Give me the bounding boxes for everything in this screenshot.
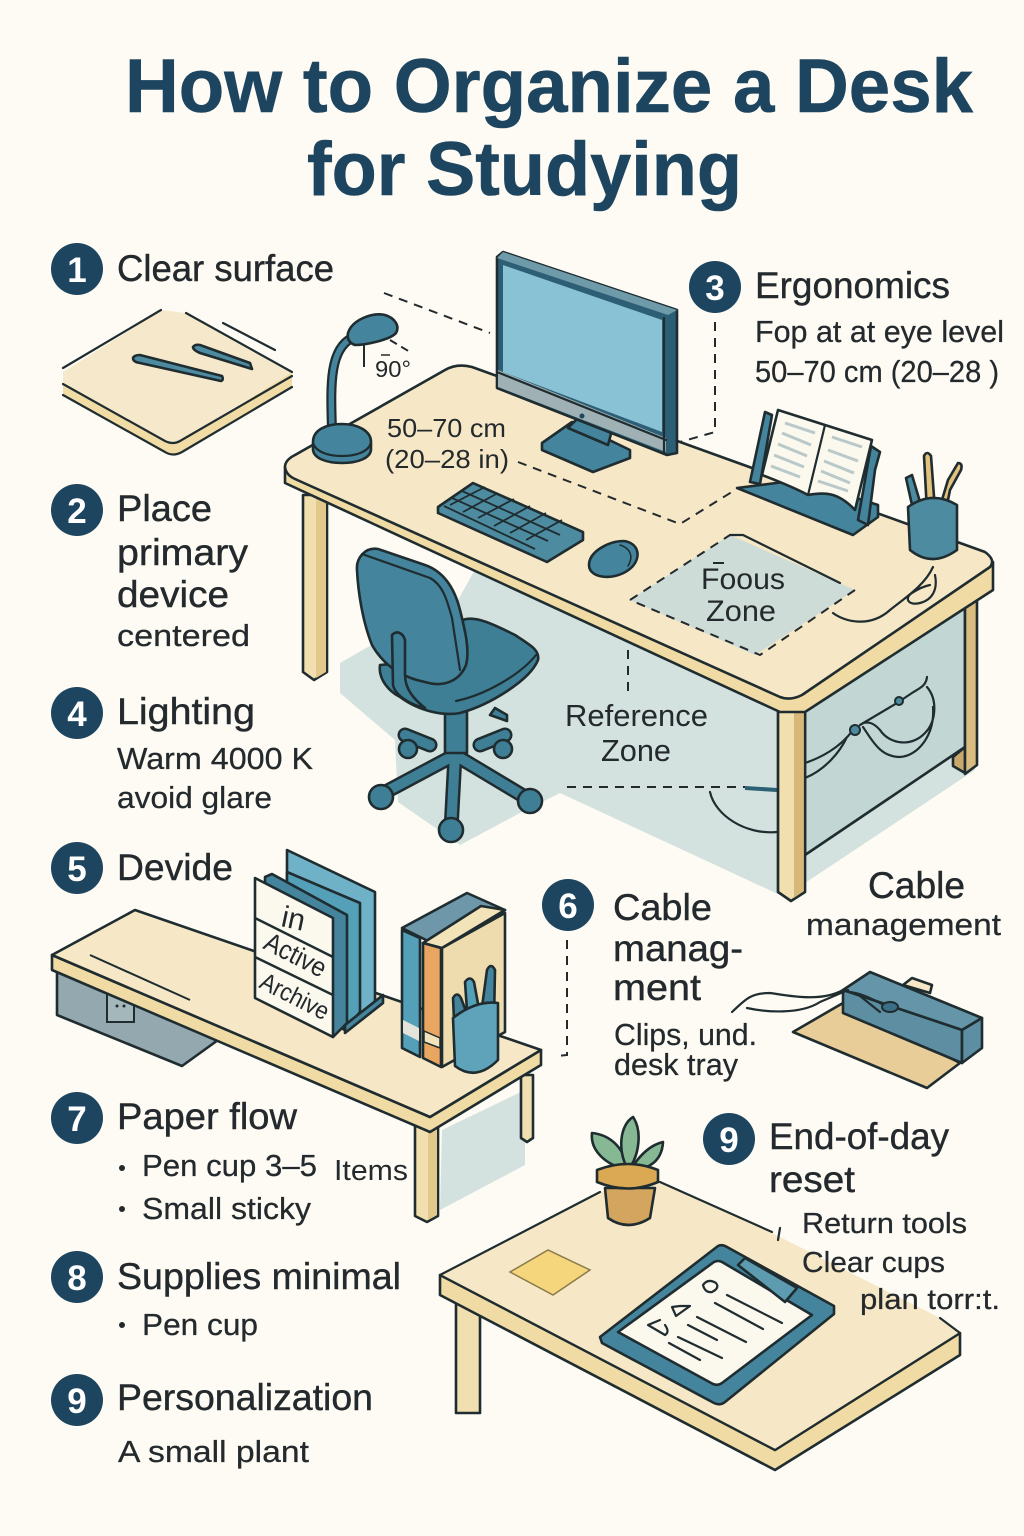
step 7: paper flow: 7 [67, 1100, 87, 1139]
edge [440, 1275, 960, 1470]
step 9: end-of-day reset: reset [769, 1159, 856, 1200]
step 7: paper flow: Pen cup 3–5 [142, 1148, 317, 1183]
step 5: divide: Devide [117, 847, 233, 888]
step 7: paper flow: Small sticky [142, 1191, 312, 1226]
cable management label [806, 865, 1001, 942]
file sorter: Archive [255, 967, 334, 1026]
title: How to Organize a Desk [125, 44, 974, 129]
step 2: place primary device: Place [117, 488, 212, 529]
step 9: end-of-day reset [703, 1113, 1000, 1316]
dimension: angle: 90° [375, 356, 411, 382]
step 2: place primary device [51, 484, 250, 653]
lamp [313, 314, 397, 463]
dimension: angle [364, 293, 490, 382]
step 2: place primary device: device [117, 574, 229, 615]
step 3: ergonomics: Fop at at eye level [755, 314, 1004, 349]
floor shadow [340, 560, 975, 895]
step 4: lighting [51, 687, 313, 815]
file sorter: in [279, 901, 308, 938]
file sorter [255, 850, 383, 1037]
step 7: paper flow [51, 1092, 408, 1226]
step 2: place primary device: centered [117, 618, 250, 653]
step 3: ergonomics: Ergonomics [755, 265, 950, 306]
step 9: end-of-day reset: 9 [719, 1121, 739, 1160]
mouse [589, 541, 638, 577]
desk edge [285, 467, 993, 712]
reference zone: Zone [601, 733, 671, 768]
step 9: end-of-day reset: Clear cups [802, 1247, 945, 1279]
front leg [778, 708, 805, 901]
step 3: ergonomics: 3 [705, 269, 725, 308]
step 6: cable management: 6 [558, 887, 578, 926]
step 6: cable management: Clips, und. [614, 1017, 757, 1052]
focus zone [630, 535, 936, 655]
step 9: personalization: 9 [67, 1382, 87, 1421]
chair [357, 549, 542, 842]
leg [456, 1300, 480, 1413]
end-of-day desk illustration [440, 1117, 960, 1470]
monitor [497, 252, 677, 472]
step 9: personalization: Personalization [117, 1377, 373, 1418]
illustration: clear desk surface [63, 310, 292, 454]
step 5: divide [51, 842, 233, 894]
desk top [285, 366, 992, 699]
sticky note [510, 1250, 590, 1295]
keyboard [438, 483, 583, 562]
step 4: lighting: 4 [67, 695, 87, 734]
step 7: paper flow: Paper flow [117, 1096, 297, 1137]
step 6: cable management: Cable [613, 887, 712, 928]
step 9: end-of-day reset: plan torr:t. [860, 1284, 1000, 1316]
step 6: cable management: desk tray [614, 1047, 738, 1082]
step 9: personalization [51, 1374, 373, 1469]
step 9: end-of-day reset: Return tools [802, 1208, 967, 1240]
cable management label: management [806, 907, 1001, 942]
step 8: supplies minimal: Supplies minimal [117, 1256, 401, 1297]
under-desk panel [805, 603, 965, 855]
shadow [440, 1090, 525, 1210]
focus zone: Zone [706, 595, 776, 628]
step 4: lighting: Warm 4000 K [117, 741, 313, 776]
step 3: ergonomics: 50–70 cm (20–28 ) [755, 354, 999, 389]
step 9: personalization: A small plant [118, 1434, 309, 1469]
step 6: cable management [542, 879, 757, 1082]
viewing distance label: 50–70 cm [387, 413, 506, 443]
plug cable [710, 788, 777, 832]
step 1: clear surface heading: 1 [67, 251, 87, 290]
step 8: supplies minimal [51, 1251, 401, 1342]
step 2: place primary device: 2 [67, 492, 87, 531]
illustration: under-desk cable tray [732, 972, 982, 1088]
cable under desk [805, 677, 934, 778]
potted plant [592, 1117, 663, 1225]
right leg [953, 747, 965, 773]
back-left leg [303, 495, 327, 680]
title [125, 44, 974, 212]
step 4: lighting: avoid glare [117, 780, 272, 815]
step 6: cable management: ment [613, 967, 702, 1008]
top [52, 910, 541, 1117]
step 7: paper flow: Items [334, 1155, 408, 1187]
secondary desk illustration [52, 850, 541, 1222]
pen cup [453, 966, 498, 1073]
viewing distance label: (20–28 in) [385, 444, 509, 474]
cable management label: Cable [868, 865, 965, 906]
step 4: lighting: Lighting [117, 691, 255, 732]
step 2: place primary device: primary [117, 532, 249, 573]
reference zone: Reference [565, 698, 708, 733]
step 8: supplies minimal: 8 [67, 1259, 87, 1298]
edge [52, 955, 541, 1132]
step 5: divide: 5 [67, 850, 87, 889]
viewing distance label [385, 322, 735, 524]
book stand [737, 410, 880, 535]
main desk illustration [285, 252, 993, 901]
pen cup [906, 453, 962, 559]
step 1: clear surface heading: Clear surface [117, 248, 334, 289]
file sorter: Active [259, 927, 332, 983]
reference zone [565, 650, 745, 787]
step 9: end-of-day reset: End-of-day [769, 1116, 949, 1157]
title: for Studying [307, 127, 742, 212]
top [440, 1172, 960, 1450]
step 1: clear surface heading [51, 243, 334, 295]
step 6: cable management: manag- [613, 928, 743, 969]
focus zone: Foous [701, 563, 785, 596]
clipboard [600, 1245, 834, 1404]
legs [521, 1075, 533, 1142]
step 3: ergonomics [689, 261, 1004, 389]
step 8: supplies minimal: Pen cup [142, 1307, 258, 1342]
drawer [57, 970, 225, 1066]
books [402, 893, 505, 1067]
